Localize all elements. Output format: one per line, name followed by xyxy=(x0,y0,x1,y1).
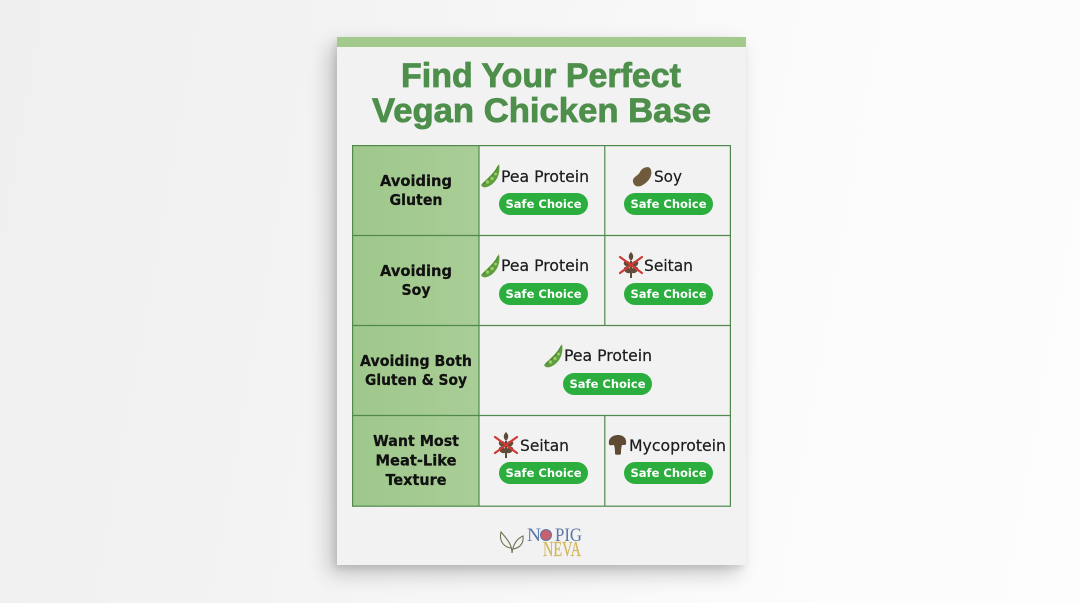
icon: crossed-out wheat xyxy=(620,252,642,278)
badge: safe choice: Safe Choice xyxy=(630,466,707,480)
title: Vegan Chicken Base xyxy=(372,92,711,130)
cell: soy: Soy xyxy=(654,167,682,186)
row: avoiding both xyxy=(360,344,652,395)
wordmark: PIG xyxy=(555,525,582,546)
cell: seitan: Seitan xyxy=(520,436,569,455)
header: want most meat-like texture: Meat-Like xyxy=(376,452,456,470)
title xyxy=(372,57,711,130)
cell: mycoprotein: Mycoprotein xyxy=(629,436,726,455)
header: avoiding soy: Soy xyxy=(402,281,431,299)
cell: seitan xyxy=(495,432,588,484)
icon: pea pod xyxy=(544,344,562,367)
icon: pea pod xyxy=(481,164,499,187)
cell: pea protein xyxy=(481,254,589,305)
icon: soybean xyxy=(633,167,651,186)
row header column xyxy=(353,146,479,506)
title: Find Your Perfect xyxy=(401,57,681,95)
badge: safe choice: Safe Choice xyxy=(630,287,707,301)
logo: no pig neva xyxy=(500,525,582,561)
header: avoiding both gluten and soy: Avoiding Both xyxy=(360,352,472,370)
badge: safe choice: Safe Choice xyxy=(506,287,582,301)
cell: pea protein xyxy=(481,164,589,215)
header: avoiding soy: Avoiding xyxy=(380,262,452,280)
comparison table xyxy=(353,146,730,506)
row: meat-like texture xyxy=(373,432,726,489)
cell: pea protein: Pea Protein xyxy=(564,346,652,365)
badge: safe choice: Safe Choice xyxy=(630,197,707,211)
poster sheet xyxy=(337,37,746,565)
cell: mycoprotein xyxy=(609,435,726,484)
cell: seitan: Seitan xyxy=(644,256,693,275)
header: want most meat-like texture: Want Most xyxy=(373,432,459,450)
top accent bar xyxy=(337,37,746,47)
header: avoiding both gluten and soy: Gluten & Soy xyxy=(365,371,467,389)
cell: pea protein: Pea Protein xyxy=(501,256,589,275)
wordmark: NEVA xyxy=(543,537,582,561)
icon: pea pod xyxy=(481,254,499,277)
cell: pea protein: Pea Protein xyxy=(501,167,589,186)
header: avoiding gluten: Avoiding xyxy=(380,172,452,190)
icon: leaf sprout xyxy=(500,532,523,553)
cell: pea protein xyxy=(544,344,652,395)
cell: seitan xyxy=(620,252,713,305)
wordmark: N xyxy=(527,525,541,546)
cell: soy xyxy=(624,167,713,215)
header: avoiding gluten: Gluten xyxy=(390,191,442,209)
wordmark xyxy=(527,525,582,561)
icon: mushroom xyxy=(609,435,626,455)
badge: safe choice: Safe Choice xyxy=(570,377,646,391)
row: avoiding gluten xyxy=(380,164,713,215)
row: avoiding soy xyxy=(380,252,713,305)
badge: safe choice: Safe Choice xyxy=(506,466,582,480)
icon: crossed-out wheat xyxy=(495,432,517,458)
header: want most meat-like texture: Texture xyxy=(386,471,446,489)
badge: safe choice: Safe Choice xyxy=(506,197,582,211)
